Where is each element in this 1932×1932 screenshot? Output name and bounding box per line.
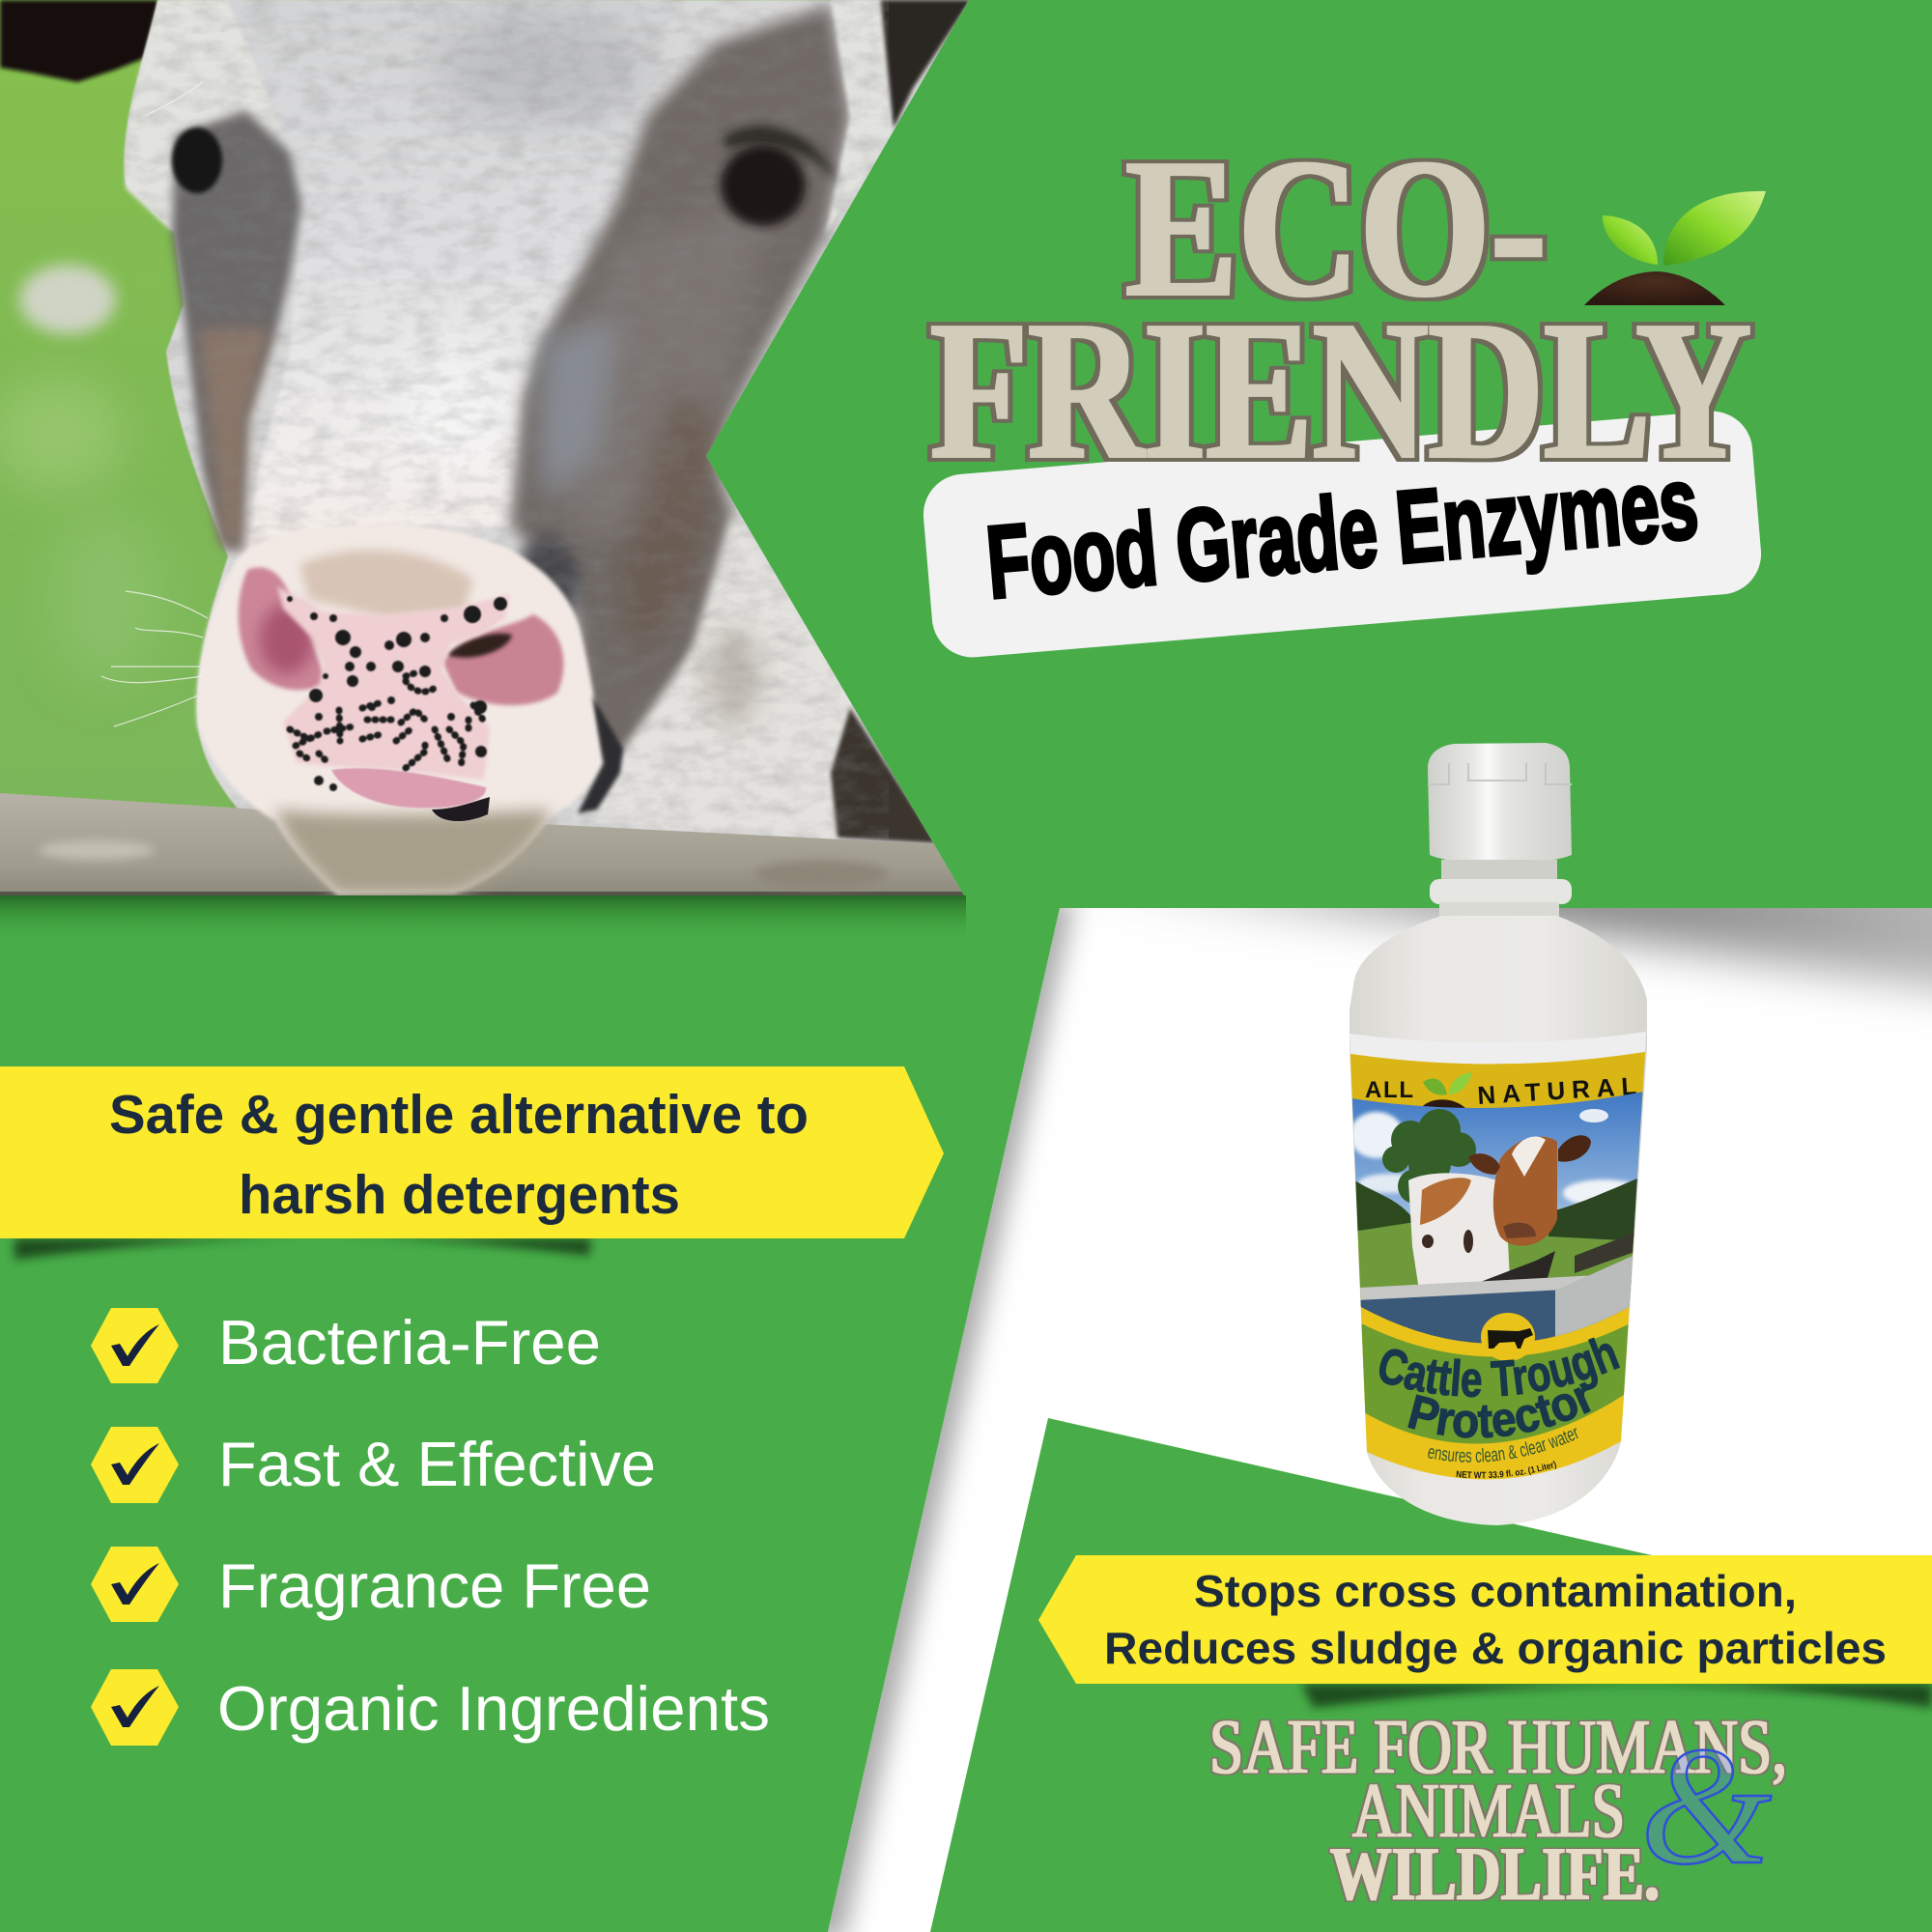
label: all natural: NATURAL	[1477, 1071, 1637, 1110]
banner: Stops cross contamination: Stops cross contamination,	[1194, 1566, 1797, 1616]
shadow under left banner	[14, 1238, 591, 1260]
label: photo	[1348, 1092, 1652, 1352]
cow head	[116, 0, 971, 898]
pill: Food Grade Enzymes	[921, 408, 1764, 661]
item: Fragrance Free: Fragrance Free	[218, 1550, 651, 1621]
heading: safe for humans, animals & wildlife: WILDLIFE.	[1330, 1832, 1660, 1916]
shadow under right banner	[1301, 1684, 1932, 1708]
bottle label	[1350, 1052, 1645, 1480]
label: cow badge	[1481, 1313, 1535, 1361]
label: product name: Cattle Trough	[1379, 1337, 1620, 1398]
photo: cow close-up	[0, 0, 976, 898]
label: product name	[1379, 1337, 1620, 1478]
fence rail	[0, 793, 971, 895]
item: Fast & Effective: Fast & Effective	[218, 1429, 656, 1499]
bottle: Cattle Trough Protector	[1350, 743, 1647, 1525]
title: ECO-FRIENDLY: FRIENDLY	[930, 279, 1751, 500]
banner: Stops cross contamination	[1038, 1555, 1932, 1684]
heading: safe for humans, animals & wildlife: ANIMALS	[1352, 1769, 1625, 1854]
heading: safe for humans, animals & wildlife	[1209, 1705, 1787, 1916]
label: product name: Protector	[1407, 1387, 1591, 1438]
list: benefits	[91, 1307, 770, 1746]
ampersand: &	[1640, 1712, 1772, 1899]
bottle cap	[1428, 743, 1572, 864]
title: ECO-FRIENDLY	[930, 117, 1751, 500]
nose speckles	[287, 596, 507, 791]
title: ECO-FRIENDLY: ECO-	[1125, 117, 1547, 338]
whiskers	[101, 82, 208, 726]
shadow under photo	[0, 895, 966, 944]
label: green band	[1361, 1318, 1629, 1422]
panel: lower right green section	[930, 1418, 1932, 1932]
bottle body	[1350, 916, 1647, 1525]
eye right	[721, 127, 840, 226]
label: all natural	[1365, 1071, 1637, 1110]
label: product name: NET WT 33.9 fl. oz. (1 Liter)	[1457, 1461, 1557, 1478]
label: all natural: ALL	[1365, 1077, 1413, 1103]
icon: sprout	[1584, 191, 1766, 305]
banner: Stops cross contamination: Reduces sludge & organic particles	[1104, 1623, 1887, 1673]
banner: Safe & gentle: harsh detergents	[239, 1164, 680, 1226]
panel: white diagonal section	[804, 869, 1932, 1932]
heading: safe for humans, animals & wildlife: SAFE FOR HUMANS,	[1209, 1705, 1787, 1790]
banner: Safe & gentle: Safe & gentle alternative to	[109, 1084, 809, 1146]
banner: Safe & gentle	[0, 1066, 944, 1238]
item: Organic Ingredients: Organic Ingredients	[217, 1673, 770, 1744]
muzzle	[196, 524, 623, 895]
eye left	[172, 128, 222, 193]
item: Bacteria-Free: Bacteria-Free	[218, 1307, 601, 1378]
item: Bacteria-Free	[91, 1307, 601, 1383]
label: product name: ensures clean & clear water	[1428, 1428, 1578, 1463]
